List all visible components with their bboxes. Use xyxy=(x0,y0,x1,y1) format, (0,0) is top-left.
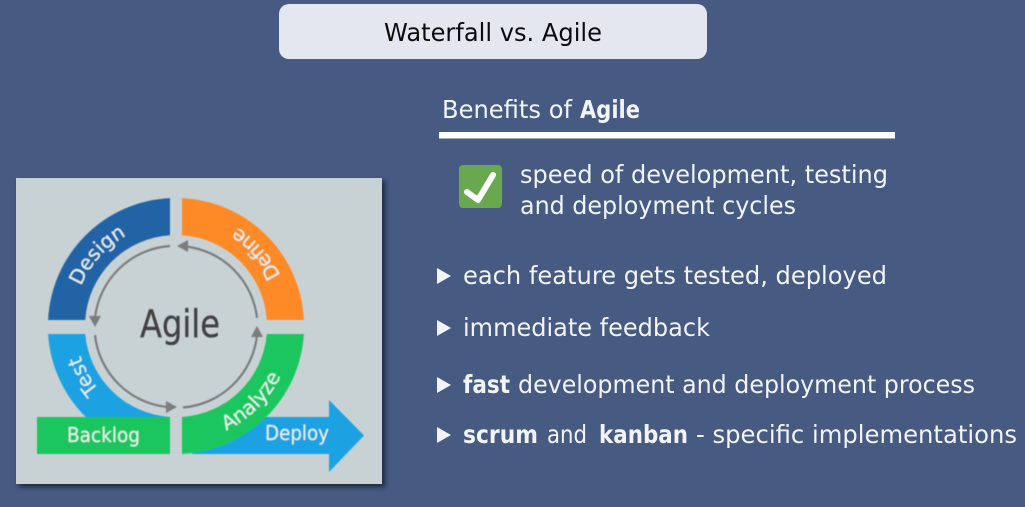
title: Waterfall vs. Agile xyxy=(384,18,602,47)
label: deploy: Deploy xyxy=(265,421,329,445)
title xyxy=(279,4,707,59)
bullet: fast development: fast xyxy=(463,370,510,399)
bullet: scrum and kanban: scrum xyxy=(463,420,538,449)
bullet: scrum and kanban: - specific implementations xyxy=(696,420,1017,449)
panel: agile diagram xyxy=(16,178,388,490)
bullet: immediate feedback: immediate feedback xyxy=(463,313,710,342)
heading: benefits of agile: Benefits of xyxy=(442,95,573,124)
icon: green check xyxy=(459,165,502,208)
text: speed of development: and deployment cycles xyxy=(520,191,796,220)
arrowheads xyxy=(89,240,263,413)
label: agile: Agile xyxy=(140,302,220,346)
text: speed of development: speed of development, testing xyxy=(520,160,888,189)
label: define: Define xyxy=(232,228,280,282)
bullet: scrum and kanban: kanban xyxy=(599,420,688,449)
segment: define xyxy=(182,198,304,320)
label: analyze: Analyze xyxy=(223,372,280,432)
label: backlog: Backlog xyxy=(67,423,140,447)
heading underline xyxy=(439,132,895,138)
heading: benefits of agile xyxy=(442,95,640,124)
segment: test xyxy=(48,334,170,421)
bullet: scrum and kanban xyxy=(437,420,1017,449)
text: speed of development xyxy=(520,160,888,220)
cycle arrows xyxy=(95,246,257,408)
bullet: scrum and kanban: and xyxy=(547,420,587,449)
segment: design xyxy=(48,198,170,320)
bullet: fast development: development and deployment process xyxy=(518,370,975,399)
bullet: each feature: each feature gets tested, deployed xyxy=(463,261,887,290)
box: backlog xyxy=(37,417,170,454)
segment: analyze xyxy=(182,334,304,454)
label: test: Test xyxy=(68,355,97,400)
heading: benefits of agile: Agile xyxy=(580,95,640,124)
label: design: Design xyxy=(68,227,126,285)
arrow: deploy xyxy=(192,400,364,472)
